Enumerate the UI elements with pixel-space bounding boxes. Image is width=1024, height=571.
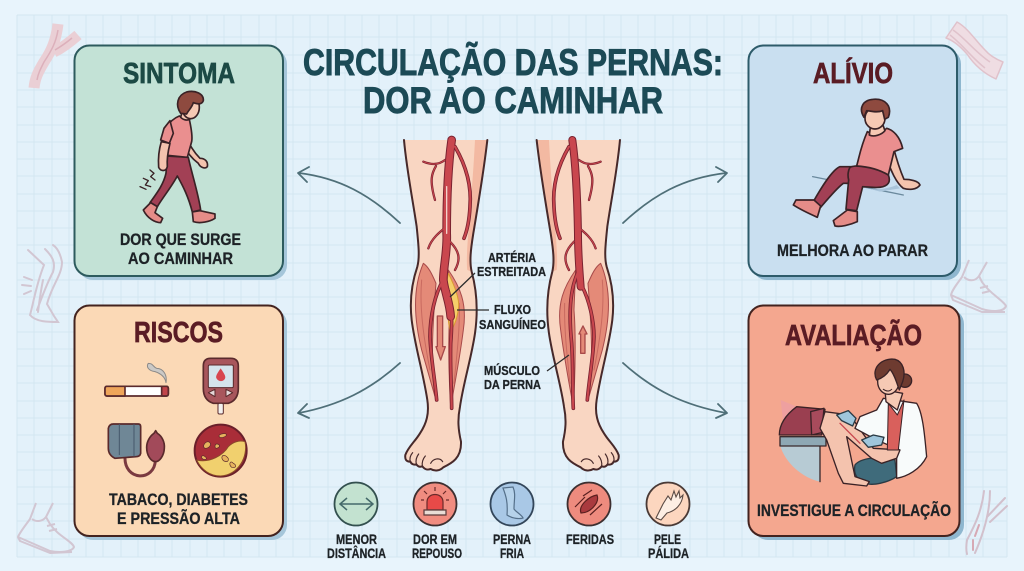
caption: riscos: TABACO, DIABETES [109, 490, 248, 509]
symptom: dor em repouso: REPOUSO [412, 546, 462, 561]
illustration: left leg with narrowed artery [404, 140, 487, 470]
decorative icon: artery bottom right [966, 491, 1007, 554]
label: fluxo sanguineo: FLUXO [494, 302, 531, 317]
symptom: pele palida [646, 482, 690, 561]
illustration: right leg with muscle [537, 140, 620, 470]
icon: cigarette [105, 363, 168, 396]
symptom: pele palida: PELE [654, 532, 681, 547]
label: musculo da perna: DA PERNA [484, 377, 542, 392]
heading: avaliacao: AVALIAÇÃO [785, 318, 922, 352]
decorative icon: artery top left [34, 24, 78, 88]
arrow: to riscos [298, 363, 400, 418]
symptom: dor em repouso: DOR EM [413, 532, 457, 547]
caption: sintoma: DOR QUE SURGE [120, 230, 241, 249]
decorative icon: artery top right [946, 22, 1003, 79]
decorative icon: shoe right [951, 260, 1006, 312]
figure: sitting man resting [793, 99, 920, 226]
panel: avaliacao [748, 306, 964, 540]
icon: cold leg [490, 482, 534, 526]
panel: alivio [748, 46, 961, 280]
symptom: perna fria: FRIA [500, 546, 524, 561]
arrow: to avaliacao [623, 363, 727, 418]
panel: riscos [74, 306, 287, 540]
heading: alivio: ALÍVIO [813, 56, 893, 90]
icon: clogged artery cross-section [195, 425, 247, 477]
symptom: menor distancia [327, 482, 386, 561]
heading: riscos: RISCOS [134, 317, 223, 349]
figure: walking man with leg pain [140, 91, 215, 223]
label: musculo da perna [484, 355, 569, 392]
caption: avaliacao: INVESTIGUE A CIRCULAÇÃO [757, 500, 951, 520]
decorative icon: leg with pain left [22, 245, 62, 322]
symptom: menor distancia: MENOR [336, 532, 377, 547]
icon: alarm siren [414, 482, 456, 526]
title: CIRCULAÇÃO DAS PERNAS: [303, 41, 723, 83]
symptom: pele palida: PÁLIDA [648, 546, 689, 561]
decorative icon: shoe bottom left [18, 503, 74, 553]
symptom: feridas [566, 482, 614, 547]
title [303, 41, 723, 121]
icon: wound [568, 482, 610, 526]
caption: alivio: MELHORA AO PARAR [777, 241, 928, 260]
symptom: menor distancia: DISTÂNCIA [327, 546, 386, 561]
symptom: perna fria [490, 482, 534, 561]
symptom: dor em repouso [412, 482, 462, 561]
arrow: to alivio [623, 167, 727, 223]
caption: sintoma: AO CAMINHAR [128, 249, 233, 268]
label: arteria estreitada [450, 250, 547, 297]
icon group: risk factors [105, 358, 247, 477]
label: arteria estreitada: ESTREITADA [477, 264, 547, 279]
figure: doctor examining leg [779, 359, 927, 486]
symptom: feridas: FERIDAS [566, 532, 614, 547]
label: fluxo sanguineo [457, 302, 546, 332]
label: musculo da perna: MÚSCULO [484, 363, 540, 378]
caption: riscos [109, 490, 248, 528]
heading: sintoma: SINTOMA [123, 58, 235, 90]
caption: sintoma [120, 230, 241, 268]
icon: glucose meter [203, 358, 238, 414]
icon: pale hand [646, 482, 690, 526]
icon: blood pressure cuff [108, 424, 164, 476]
title: DOR AO CAMINHAR [363, 80, 663, 121]
panel: sintoma [74, 46, 287, 280]
caption: riscos: E PRESSÃO ALTA [117, 508, 240, 528]
label: arteria estreitada: ARTÉRIA [488, 250, 537, 265]
arrow: to sintoma [298, 167, 400, 223]
symptom: perna fria: PERNA [493, 532, 531, 547]
label: fluxo sanguineo: SANGUÍNEO [479, 317, 546, 332]
icon: double arrow [334, 482, 378, 526]
